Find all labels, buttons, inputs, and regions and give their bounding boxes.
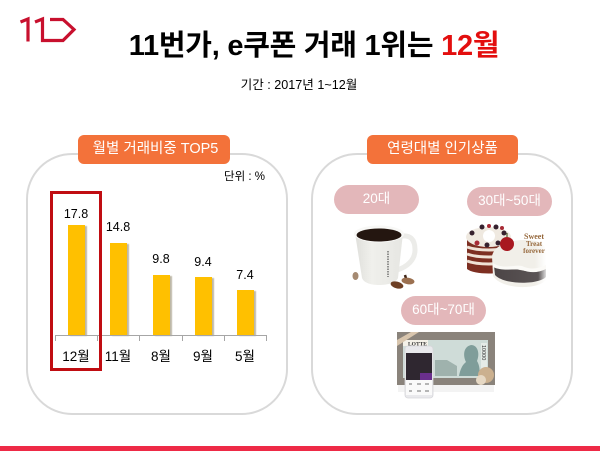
icon: gift voucher and phone: 10000 — [480, 345, 486, 360]
icon: cakes: Sweet — [524, 232, 544, 241]
value: 14.8: 14.8 — [106, 220, 130, 234]
highlight box: December — [50, 191, 102, 371]
axis — [55, 335, 267, 341]
month: May: 5월 — [235, 349, 255, 364]
heading: popular items by age: 연령대별 인기상품 — [387, 141, 498, 157]
value: 9.4: 9.4 — [194, 255, 212, 269]
period note: 기간 : 2017년 1~12월 — [241, 78, 357, 92]
bar: August — [153, 275, 170, 335]
bar: November — [110, 243, 127, 335]
icon: coffee mug — [352, 226, 418, 289]
logo: 11st — [20, 16, 76, 42]
month: December: 12월 — [62, 349, 90, 364]
icon: cakes — [466, 224, 546, 287]
age label: 30s to 50s: 30대~50대 — [478, 193, 541, 208]
value: 9.8: 9.8 — [152, 252, 170, 266]
icon: gift voucher and phone — [397, 332, 495, 398]
age label: 20s: 20대 — [363, 191, 390, 206]
value: 17.8: 17.8 — [64, 207, 88, 221]
footer bar — [0, 446, 600, 451]
heading: popular items by age — [367, 135, 518, 164]
age label: 60s to 70s — [401, 296, 486, 325]
heading: monthly top 5 — [78, 135, 230, 164]
bar chart — [55, 207, 267, 364]
month: November: 11월 — [105, 349, 131, 364]
icon: gift voucher and phone: LOTTE — [408, 342, 427, 348]
unit label: 단위 : % — [224, 171, 265, 183]
panel: popular by age — [311, 153, 573, 415]
month: September: 9월 — [193, 349, 213, 364]
age label: 30s to 50s — [467, 187, 552, 216]
age label: 20s — [334, 185, 419, 214]
panel: monthly share — [26, 153, 288, 415]
title: 11번가, e쿠폰 거래 1위는 12월 — [129, 30, 499, 62]
bar: September — [195, 277, 212, 335]
heading: monthly top 5: 월별 거래비중 TOP5 — [93, 141, 218, 157]
bar: December — [68, 225, 85, 335]
value: 7.4: 7.4 — [236, 268, 254, 282]
bar: May — [237, 290, 254, 335]
icon: cakes: Treat — [526, 240, 543, 248]
icon: cakes: forever — [523, 247, 545, 255]
month: August: 8월 — [151, 349, 171, 364]
age label: 60s to 70s: 60대~70대 — [412, 302, 475, 317]
